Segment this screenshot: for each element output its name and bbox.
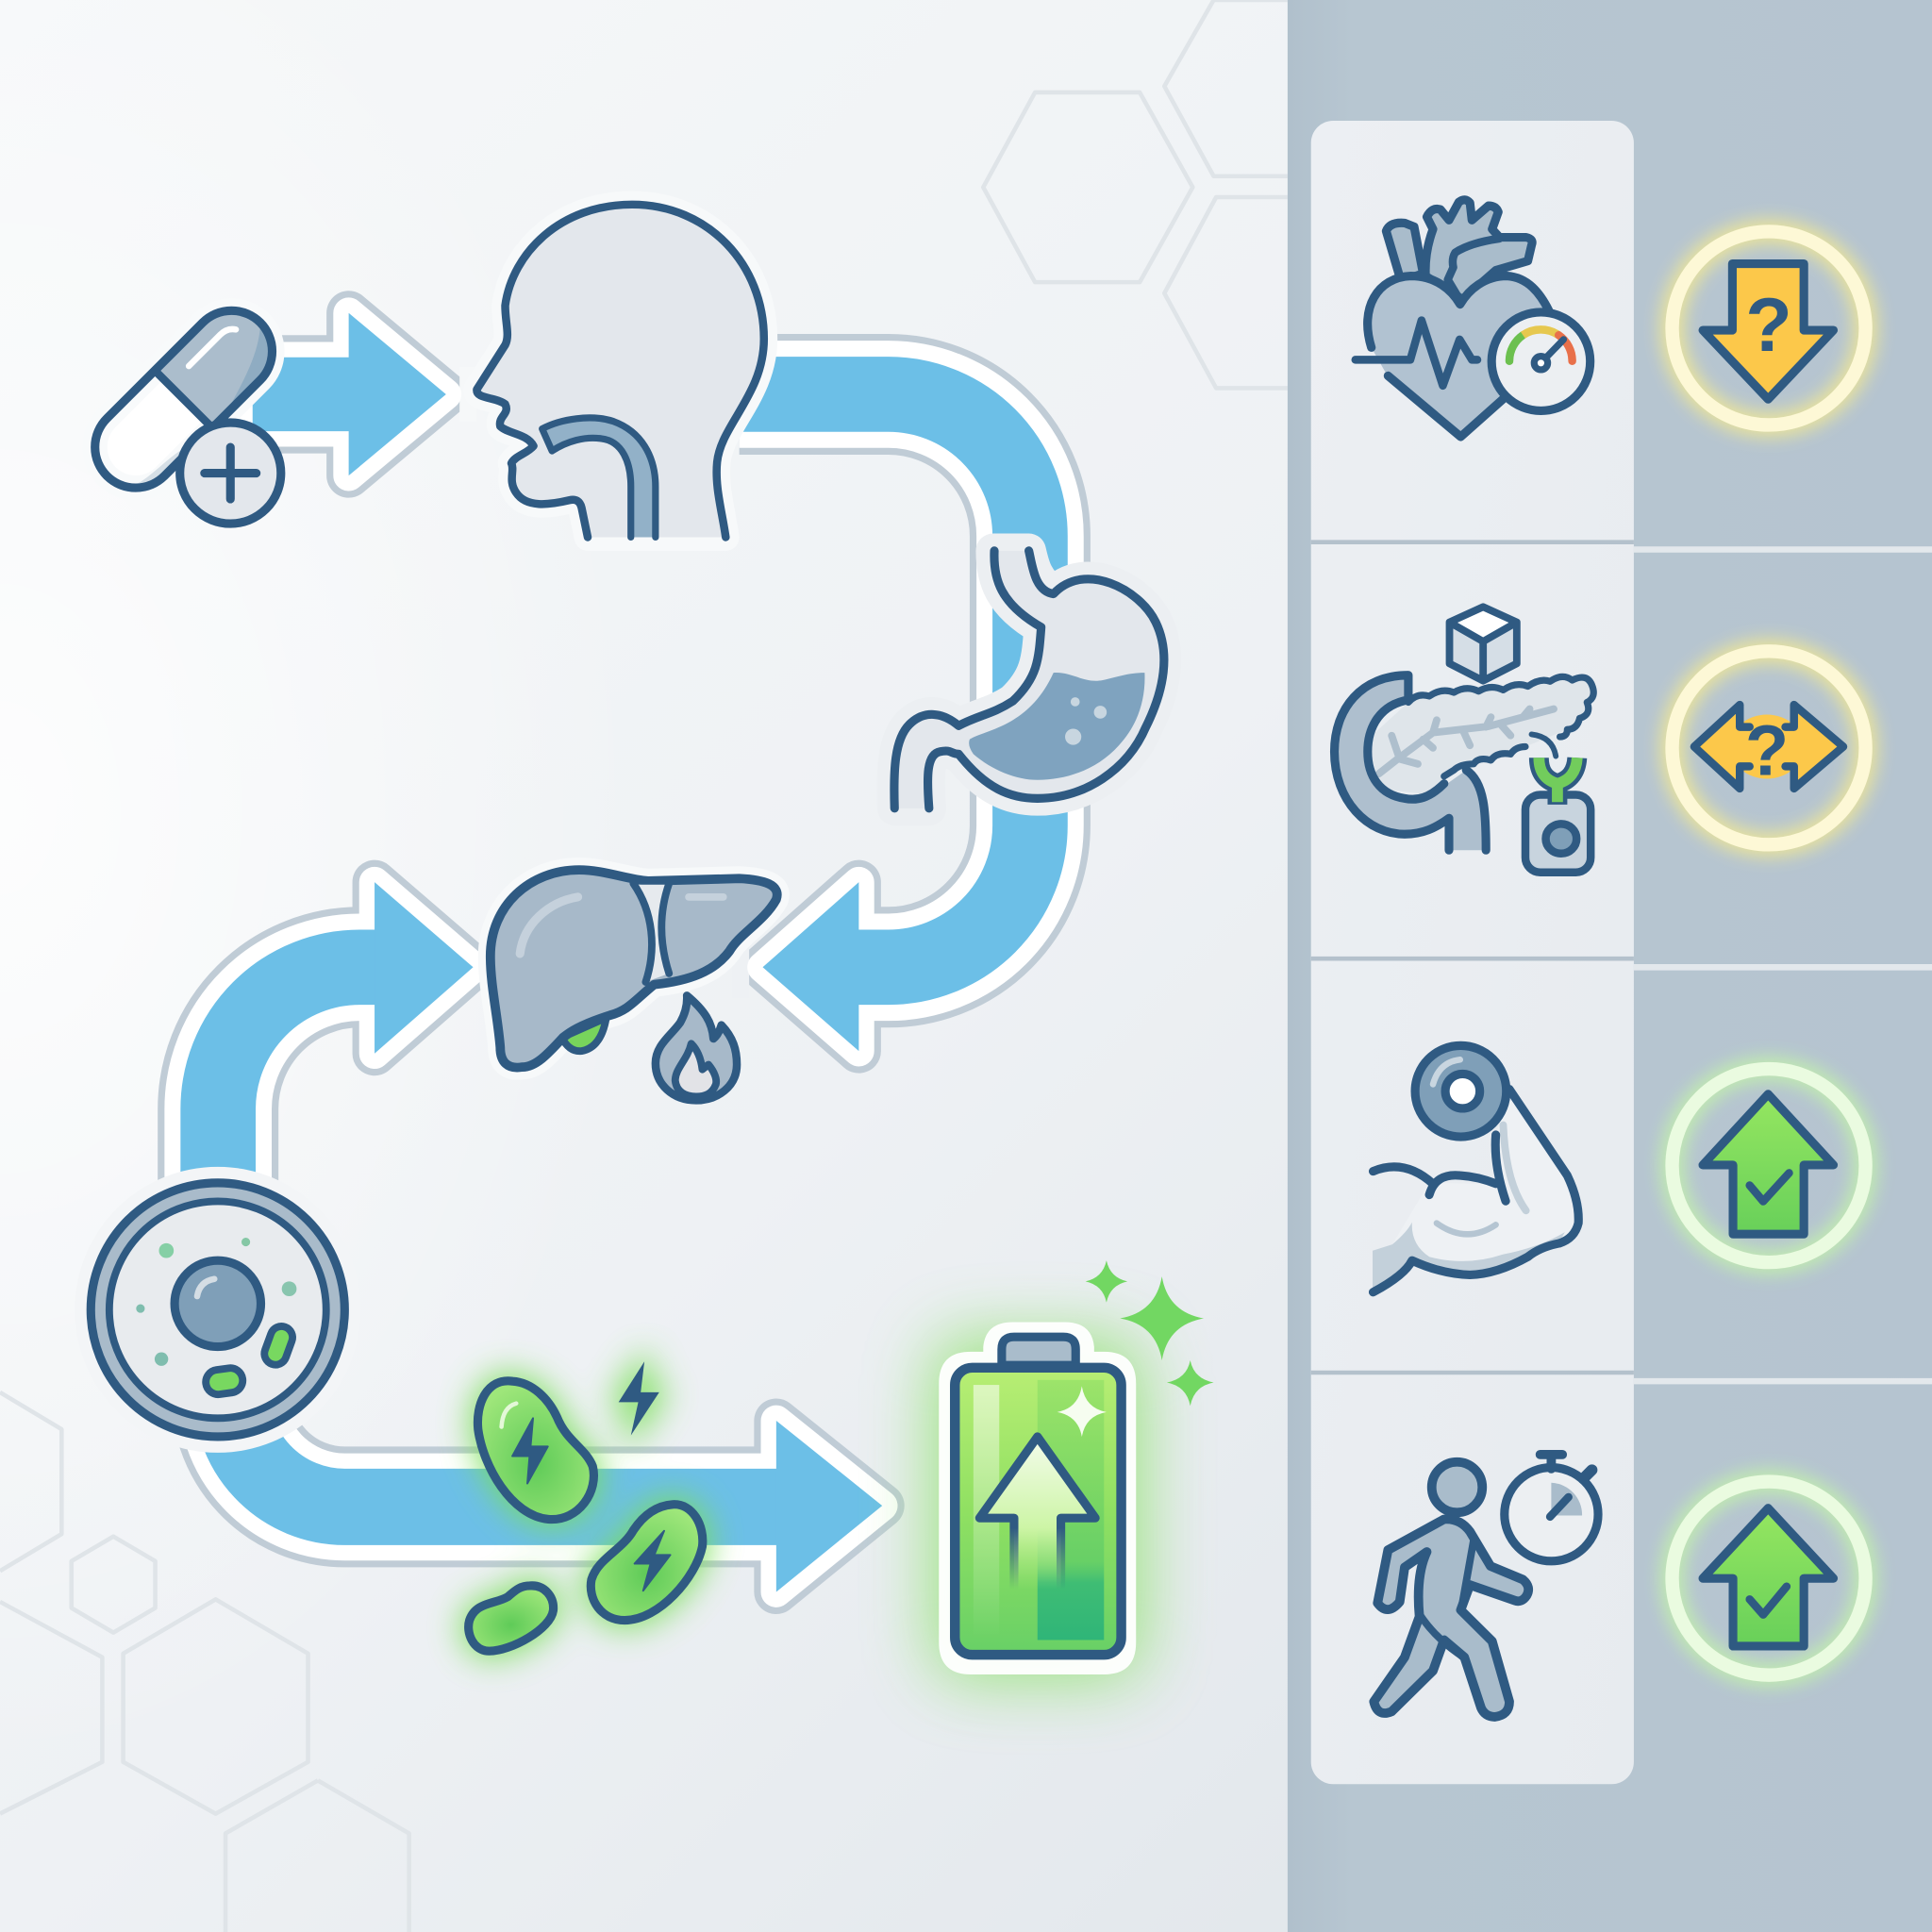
badge: uncertain bidirectional change	[1673, 651, 1866, 844]
icon: liver	[491, 870, 777, 1068]
icon: walking person with stopwatch	[1374, 1455, 1598, 1717]
icon: charging battery with sparkles	[934, 1260, 1214, 1678]
icon: flame	[656, 995, 737, 1100]
icon: stomach	[894, 551, 1164, 808]
icon: mitochondria with energy bolts	[469, 1361, 703, 1651]
badge: increase in mobility	[1673, 1482, 1866, 1675]
icon: capsule with plus	[78, 293, 289, 524]
badge: uncertain bidirectional change: ?	[1745, 711, 1789, 791]
badge: uncertain decrease	[1673, 231, 1866, 425]
arrow: pill to mouth	[253, 313, 476, 475]
badge: uncertain decrease: ?	[1745, 283, 1792, 368]
panel: outcome cards	[1311, 121, 1932, 1784]
arrow: stomach to liver	[732, 789, 1030, 1051]
panel: outcomes background	[1288, 0, 1932, 1932]
badge: increase in strength	[1673, 1069, 1866, 1262]
icon: cell	[75, 1167, 360, 1453]
arrow: liver to cell	[218, 882, 474, 1195]
icon: pancreas with sugar cube and receptor	[1335, 607, 1593, 873]
arrow: mouth to stomach	[740, 394, 1030, 702]
icon: heart with pressure gauge	[1356, 200, 1591, 437]
icon: flexed arm with weight plate	[1373, 1045, 1578, 1292]
icon: head profile with throat	[476, 205, 764, 537]
arrow: cell to battery	[231, 1386, 882, 1592]
